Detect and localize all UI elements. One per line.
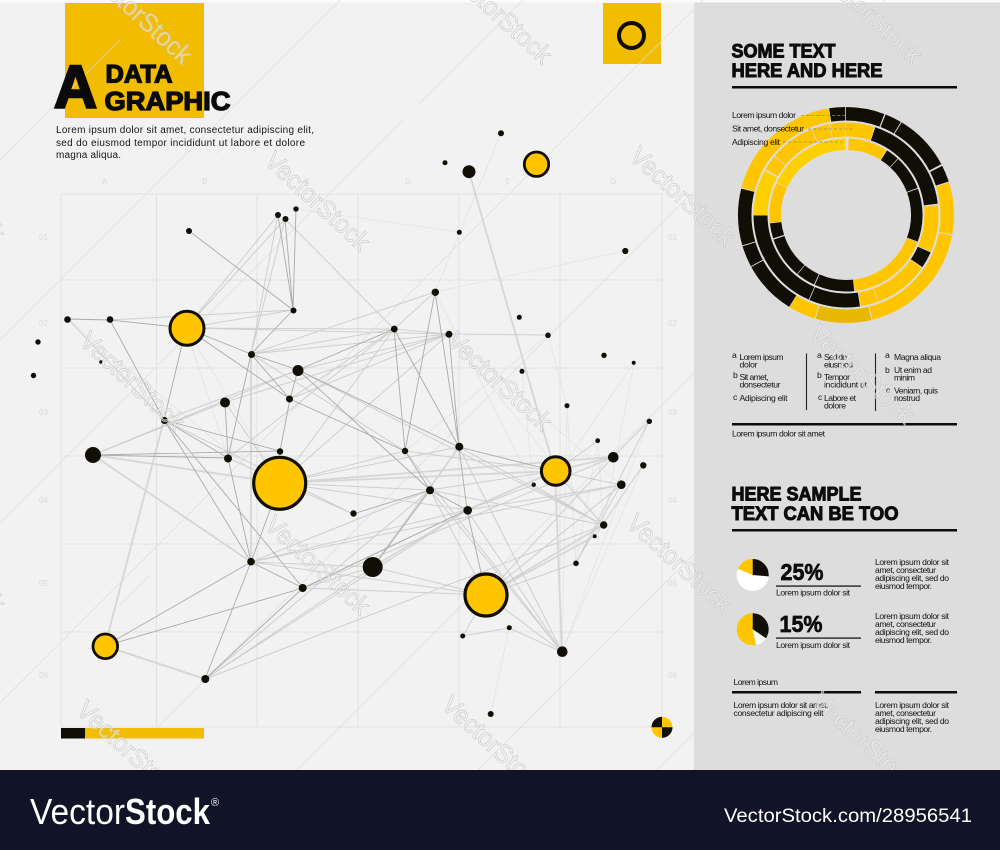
grid axis labels: E	[505, 177, 510, 186]
text block: amet, consectetur	[875, 619, 936, 629]
ring legend columns: a	[732, 350, 737, 360]
heading: here sample: HERE SAMPLE	[732, 484, 862, 506]
text block: eiusmod tempor.	[875, 635, 932, 645]
grid axis labels: B	[202, 177, 207, 186]
watermarks: VectorStock	[806, 685, 924, 797]
grid axis labels: 03	[668, 408, 677, 417]
grid axis labels: 05	[39, 579, 48, 588]
heading: some text: SOME TEXT	[732, 42, 836, 62]
watermarks: VectorStock	[74, 325, 192, 437]
footer column right: adipiscing elit, sed do	[875, 716, 949, 726]
ring legend columns: incididunt ut	[824, 380, 868, 390]
pie chart 15%	[745, 621, 761, 637]
footer logo: Stock	[125, 791, 211, 832]
text block: eiusmod tempor.	[875, 581, 932, 591]
heading: some text	[732, 42, 882, 82]
text block: Lorem ipsum dolor sit	[875, 557, 950, 567]
stat 15%: 15%	[780, 611, 822, 637]
grid axis labels: A	[102, 177, 108, 186]
watermarks: VectorStock	[259, 145, 377, 257]
ring legend columns: b	[733, 370, 738, 380]
ring legend columns: minim	[894, 372, 915, 382]
grid axis labels: 03	[39, 408, 48, 417]
progress bar	[61, 728, 204, 738]
rule	[732, 529, 957, 532]
grid axis labels: 02	[39, 319, 48, 328]
chart grid	[61, 194, 662, 727]
text block	[875, 557, 950, 591]
intro paragraph: Lorem ipsum dolor sit amet, consectetur adipiscing elit,	[56, 125, 314, 136]
watermarks: VectorStock	[259, 509, 377, 621]
title: GRAPHIC	[104, 86, 231, 116]
inner ring	[775, 144, 917, 286]
ring legend columns: c	[818, 392, 823, 402]
outer ring	[745, 114, 947, 316]
watermarks: VectorStock	[441, 325, 559, 437]
title	[54, 54, 231, 120]
ring legend columns: c	[733, 392, 738, 402]
grid axis labels: 01	[668, 233, 677, 242]
ring legend columns: Tempor	[824, 372, 850, 382]
grid axis labels: 04	[668, 496, 677, 505]
grid axis labels: 01	[39, 233, 48, 242]
grid axis labels: C	[304, 177, 310, 186]
ring legend columns: Labore et	[824, 393, 857, 403]
ring legend columns: Ut enim ad	[894, 365, 932, 375]
footer column right: eiusmod tempor.	[875, 724, 932, 734]
icon: yellow square with ring	[603, 3, 661, 64]
watermarks: VectorStock	[804, 318, 922, 430]
title: A	[54, 54, 97, 120]
grid axis labels: 06	[39, 671, 48, 680]
legend caption: Lorem ipsum dolor sit amet	[732, 428, 826, 438]
text block: Lorem ipsum dolor sit	[875, 611, 950, 621]
footer column left: Lorem ipsum	[734, 677, 778, 687]
grid axis labels: 02	[668, 319, 677, 328]
stat 25%	[776, 559, 861, 598]
ring chart labels	[732, 110, 854, 147]
ring chart labels: Lorem ipsum dolor	[732, 110, 796, 120]
text block: amet, consectetur	[875, 565, 936, 575]
ring legend columns: Adipiscing elit	[740, 393, 788, 403]
ring legend columns: Veniam, quis	[894, 386, 938, 396]
intro paragraph: sed do eiusmod tempor incididunt ut labore et dolore	[56, 138, 305, 149]
footer url: VectorStock.com/28956541	[724, 806, 972, 827]
ring legend columns: b	[817, 370, 822, 380]
heading: some text: HERE AND HERE	[732, 61, 882, 82]
heading: here sample: TEXT CAN BE TOO	[732, 504, 898, 525]
footer column right: Lorem ipsum dolor sit	[875, 700, 950, 710]
ring chart	[745, 114, 947, 316]
network edges	[68, 133, 649, 714]
ring legend columns: Sit amet,	[740, 372, 768, 382]
grid axis labels: G	[610, 177, 616, 186]
grid axis labels: 04	[39, 496, 48, 505]
text block: adipiscing elit, sed do	[875, 627, 949, 637]
intro paragraph	[56, 125, 314, 161]
footer bar	[0, 770, 1000, 850]
title: DATA	[106, 60, 172, 88]
watermarks: VectorStock	[436, 689, 554, 801]
ring legend columns: b	[885, 365, 890, 375]
ring legend columns: Magna aliqua	[894, 352, 941, 362]
ring legend columns: a	[817, 350, 822, 360]
rule	[732, 86, 957, 88]
rule	[732, 423, 957, 426]
grid axis labels: 06	[668, 671, 677, 680]
top edge strip	[0, 0, 1000, 2]
stat 25%: 25%	[780, 559, 824, 585]
grid axis labels: 05	[668, 579, 677, 588]
footer logo: Vector	[30, 791, 125, 832]
footer column left: Lorem ipsum dolor sit amet,	[734, 700, 828, 710]
ring legend columns: c	[886, 385, 891, 395]
ring legend columns: dolore	[824, 400, 846, 410]
ring legend columns: donsectetur	[740, 380, 781, 390]
yellow hub nodes	[93, 152, 570, 659]
ring legend columns: eiusmod	[824, 360, 853, 370]
footer column right: amet, consectetur	[875, 708, 936, 718]
ring legend columns: a	[885, 350, 890, 360]
text block	[875, 611, 950, 645]
intro paragraph: magna aliqua.	[56, 150, 121, 161]
watermarks: VectorStock	[621, 507, 739, 619]
watermarks: VectorStock	[71, 694, 189, 806]
footer logo: ®	[211, 797, 219, 809]
stat 15%	[776, 611, 861, 650]
network chart	[31, 130, 652, 717]
stat 15%: Lorem ipsum dolor sit	[776, 640, 851, 650]
yellow title block	[65, 3, 204, 118]
grid axis labels	[39, 177, 677, 680]
stat 25%: Lorem ipsum dolor sit	[776, 588, 851, 598]
pie chart 25%	[745, 567, 761, 583]
footer column right	[875, 691, 957, 734]
heading: here sample	[732, 484, 898, 525]
panel: right sidebar	[694, 2, 1000, 770]
small black nodes	[31, 130, 652, 717]
ring legend columns: nostrud	[894, 393, 920, 403]
text block: adipiscing elit, sed do	[875, 573, 949, 583]
footer column left: consectetur adipiscing elit	[734, 708, 824, 718]
ring legend columns: Sed do	[824, 352, 847, 362]
grid axis labels: D	[405, 177, 411, 186]
footer column left	[732, 677, 861, 718]
ring legend columns	[732, 350, 941, 411]
middle ring	[760, 130, 932, 300]
footer logo	[30, 791, 219, 832]
ring chart labels: Sit amet, donsectetur	[732, 124, 804, 134]
ring legend columns: dolor	[740, 360, 758, 370]
watermarks: VectorStock	[624, 140, 742, 252]
ring chart labels: Adipiscing elit	[732, 137, 781, 147]
ring legend columns: Lorem ipsum	[740, 352, 784, 362]
icon: target marker	[652, 717, 672, 738]
